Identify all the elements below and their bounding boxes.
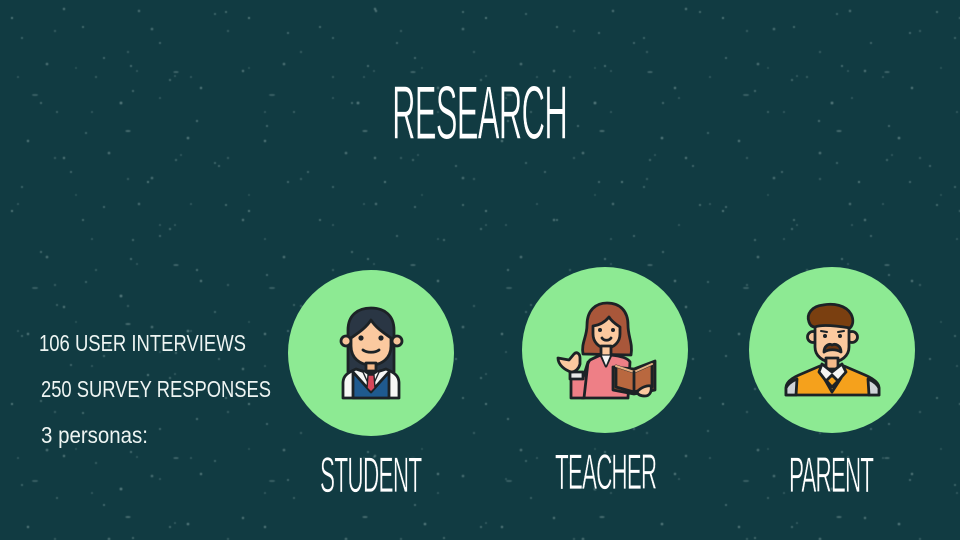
title: RESEARCH [392, 71, 568, 156]
text block: research stats [39, 330, 271, 448]
stat: personas: 3 personas: [41, 422, 148, 448]
persona: parent [749, 267, 915, 504]
label: parent: PARENT [789, 448, 874, 504]
circle: student background [288, 270, 454, 436]
stat: user interviews: 106 USER INTERVIEWS [39, 330, 246, 356]
circle: parent background [749, 267, 915, 433]
persona: teacher [522, 267, 688, 501]
icon: teacher [558, 303, 655, 398]
persona: student [288, 270, 454, 504]
icon: student [341, 308, 402, 398]
stat: survey responses: 250 SURVEY RESPONSES [41, 376, 271, 402]
icon: parent [786, 304, 879, 395]
label: student: STUDENT [320, 448, 422, 504]
label: teacher: TEACHER [555, 445, 657, 501]
circle: teacher background [522, 267, 688, 433]
